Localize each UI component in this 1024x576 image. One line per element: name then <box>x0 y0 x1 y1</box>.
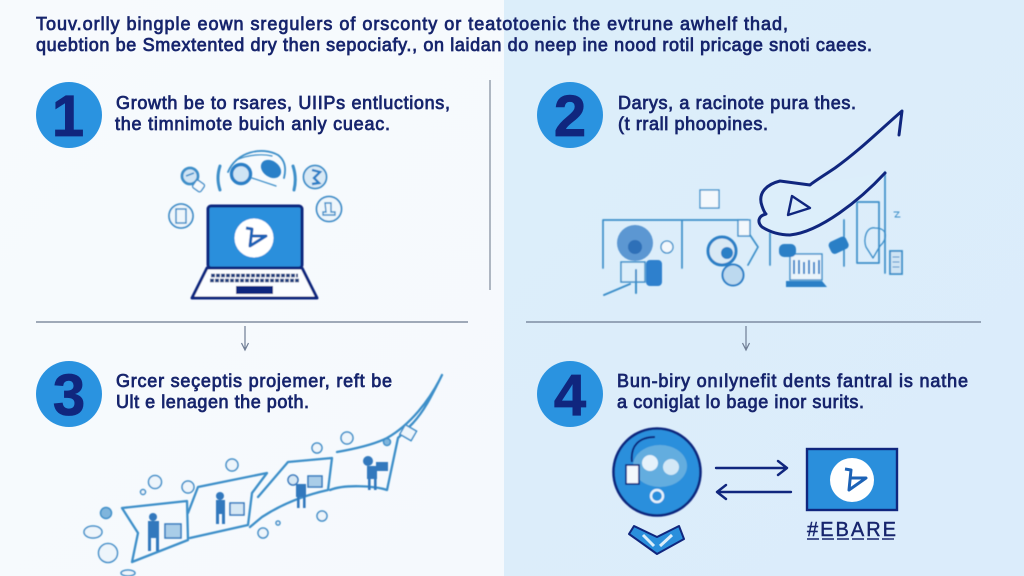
number badge 4 <box>537 361 603 428</box>
step 1 text: the timnimote buich anly cueac. <box>115 114 390 134</box>
number badge 4: 4 <box>554 363 586 428</box>
left background panel <box>0 0 504 576</box>
arrow: down right <box>742 326 750 350</box>
step 2 text: Darys, a racinote pura thes. <box>618 93 856 113</box>
step 4 text: a coniglat lo bage inor surits. <box>617 392 864 412</box>
number badge 1: 1 <box>52 84 84 149</box>
step 4 text <box>617 371 968 412</box>
icon: laptop <box>192 206 317 298</box>
arrow: down left <box>242 326 248 350</box>
step 1 <box>36 82 450 298</box>
step 4 text: Bun-biry onılynefit dents fantral is nathe <box>617 371 968 391</box>
icon: lamp and device <box>865 212 902 274</box>
icon: laptop with orbiting icons <box>169 151 342 298</box>
icon: person at desk <box>604 225 673 295</box>
icon: floating note <box>700 190 719 208</box>
step 2 text: (t rrall phoopines. <box>618 114 768 134</box>
arrow: right <box>716 461 787 475</box>
icon: globe with people <box>614 428 700 516</box>
number badge 1 <box>36 82 102 149</box>
vertical divider <box>489 80 491 290</box>
number badge 3: 3 <box>53 363 85 428</box>
title text: Touv.orlly bingple eown sregulers of orsconty or teatotoenic the evtrune awhelf thad, <box>36 14 788 34</box>
icon: worker figures <box>148 456 388 551</box>
horizontal divider right <box>526 321 981 323</box>
step 1 text: Growth be to rsares, UIIPs entluctions, <box>116 93 450 113</box>
horizontal divider left <box>36 321 468 323</box>
step 3 text: Grcer seçeptis projemer, reft be <box>116 371 392 391</box>
arrow: left <box>717 485 791 499</box>
icon: person badge <box>316 196 342 222</box>
icon: gear badge <box>304 166 326 188</box>
icons: scattered coins <box>84 425 417 576</box>
illustration: rising path of panels <box>84 375 442 576</box>
right background panel <box>504 0 1024 576</box>
icon: globe with badge <box>708 220 750 286</box>
step 2 <box>537 82 902 295</box>
icon: small laptop with chat bubbles <box>779 235 850 287</box>
number badge 2 <box>537 82 603 149</box>
icon: blue screen with logo <box>807 449 897 510</box>
step 4 <box>537 361 968 554</box>
icon: bulb <box>182 168 205 193</box>
step 3 text <box>116 371 392 412</box>
label: hebare: #EBARE <box>807 519 896 541</box>
step 3 text: Ult e lenagen the poth. <box>116 392 309 412</box>
icon: open book <box>629 526 684 554</box>
number badge 3 <box>36 361 102 428</box>
icon: document badge <box>169 204 193 228</box>
step 1 text <box>115 93 450 134</box>
step 2 text <box>618 93 856 134</box>
step 3 <box>36 361 442 576</box>
title text: quebtion be Smextented dry then sepociafy., on laidan do neep ine nood rotil pricage snoti caees. <box>36 35 872 55</box>
icon: central gears dome <box>218 151 295 190</box>
illustration: workspace scenes <box>603 172 902 295</box>
number badge 2: 2 <box>554 84 586 149</box>
title text <box>36 14 872 55</box>
icon: hand with rising arrow <box>758 111 902 235</box>
